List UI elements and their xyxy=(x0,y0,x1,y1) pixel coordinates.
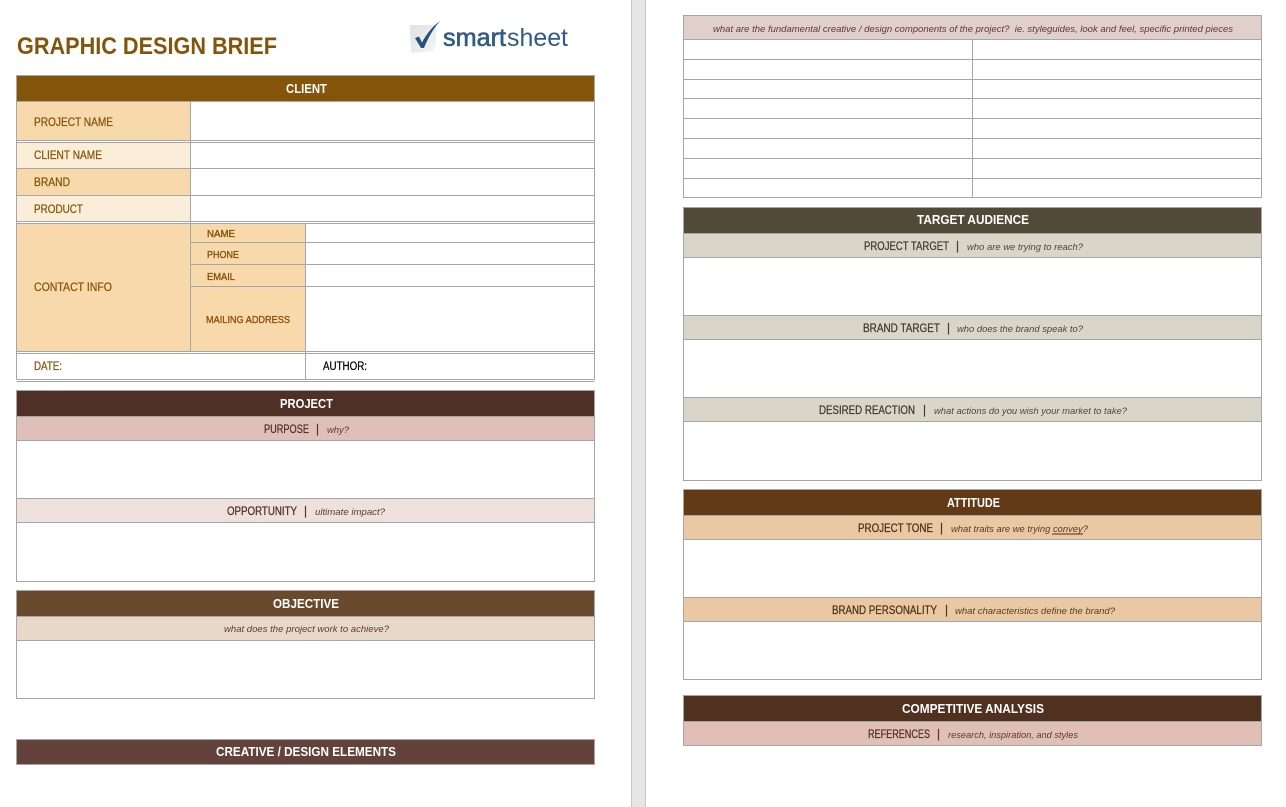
desired reaction row xyxy=(819,405,1128,417)
field labels: EMAIL xyxy=(207,272,235,283)
wordmark xyxy=(443,24,568,52)
project tone row: PROJECT TONE xyxy=(858,523,933,535)
panel: client xyxy=(16,76,594,382)
field labels: CLIENT NAME xyxy=(34,150,102,162)
heading: attitude: ATTITUDE xyxy=(947,495,1000,510)
panel: creative components table xyxy=(684,16,1262,198)
project tone row xyxy=(858,523,1089,535)
field labels: PHONE xyxy=(207,250,239,261)
references row: | xyxy=(937,729,940,741)
title: GRAPHIC DESIGN BRIEF xyxy=(17,33,277,60)
field labels: CONTACT INFO xyxy=(34,282,112,294)
panel: target audience xyxy=(684,208,1262,480)
brand target row: | xyxy=(947,323,950,335)
heading: objective: OBJECTIVE xyxy=(273,596,339,611)
brand personality row: BRAND PERSONALITY xyxy=(832,605,937,617)
project target row: | xyxy=(956,241,959,253)
desired reaction row: DESIRED REACTION xyxy=(819,405,915,417)
purpose row: | xyxy=(316,424,319,436)
purpose row: why? xyxy=(327,425,350,436)
icon: check mark xyxy=(410,21,440,53)
field labels: MAILING ADDRESS xyxy=(206,315,290,326)
panel: project xyxy=(16,390,594,582)
panel: attitude xyxy=(684,490,1262,680)
panel: creative / design elements header xyxy=(16,740,594,764)
field labels: DATE: xyxy=(34,361,62,373)
brand target row xyxy=(863,323,1084,335)
wordmark: smart xyxy=(443,24,506,52)
panel: objective xyxy=(16,590,594,698)
opportunity row: OPPORTUNITY xyxy=(227,506,297,518)
project tone row: | xyxy=(940,523,943,535)
heading: target audience: TARGET AUDIENCE xyxy=(917,212,1029,227)
project target row: PROJECT TARGET xyxy=(864,241,949,253)
wordmark: sheet xyxy=(507,24,568,52)
purpose row xyxy=(264,424,350,436)
logo: smartsheet xyxy=(410,21,568,53)
field labels: PRODUCT xyxy=(34,204,83,216)
field labels xyxy=(34,117,367,373)
brand personality row: | xyxy=(945,605,948,617)
opportunity row xyxy=(227,506,386,518)
desired reaction row: what actions do you wish your market to take? xyxy=(934,406,1128,417)
components prompt: what are the fundamental creative / design components of the project? ie. styleguides, look and feel, specific printed pieces xyxy=(713,24,1233,35)
references row xyxy=(868,729,1078,741)
heading: competitive analysis: COMPETITIVE ANALYSIS xyxy=(902,701,1044,716)
desired reaction row: | xyxy=(923,405,926,417)
field labels: NAME xyxy=(207,229,235,240)
project target row: who are we trying to reach? xyxy=(967,242,1084,253)
references row: REFERENCES xyxy=(868,729,930,741)
project target row xyxy=(864,241,1084,253)
brand target row: who does the brand speak to? xyxy=(957,324,1084,335)
heading: project: PROJECT xyxy=(280,396,333,411)
field labels: BRAND xyxy=(34,177,70,189)
objective prompt: what does the project work to achieve? xyxy=(224,624,390,635)
references row: research, inspiration, and styles xyxy=(948,730,1078,741)
project tone row: what traits are we trying convey? xyxy=(951,524,1089,535)
brand target row: BRAND TARGET xyxy=(863,323,940,335)
field labels: PROJECT NAME xyxy=(34,117,113,129)
purpose row: PURPOSE xyxy=(264,424,309,436)
opportunity row: ultimate impact? xyxy=(315,507,386,518)
brand personality row: what characteristics define the brand? xyxy=(955,606,1116,617)
field labels: AUTHOR: xyxy=(323,361,367,373)
heading: client: CLIENT xyxy=(286,81,327,96)
panel: competitive analysis xyxy=(684,696,1262,746)
panel: creative / design elements header: CREATIVE / DESIGN ELEMENTS xyxy=(216,744,396,759)
page divider xyxy=(632,0,646,807)
opportunity row: | xyxy=(304,506,307,518)
brand personality row xyxy=(832,605,1116,617)
